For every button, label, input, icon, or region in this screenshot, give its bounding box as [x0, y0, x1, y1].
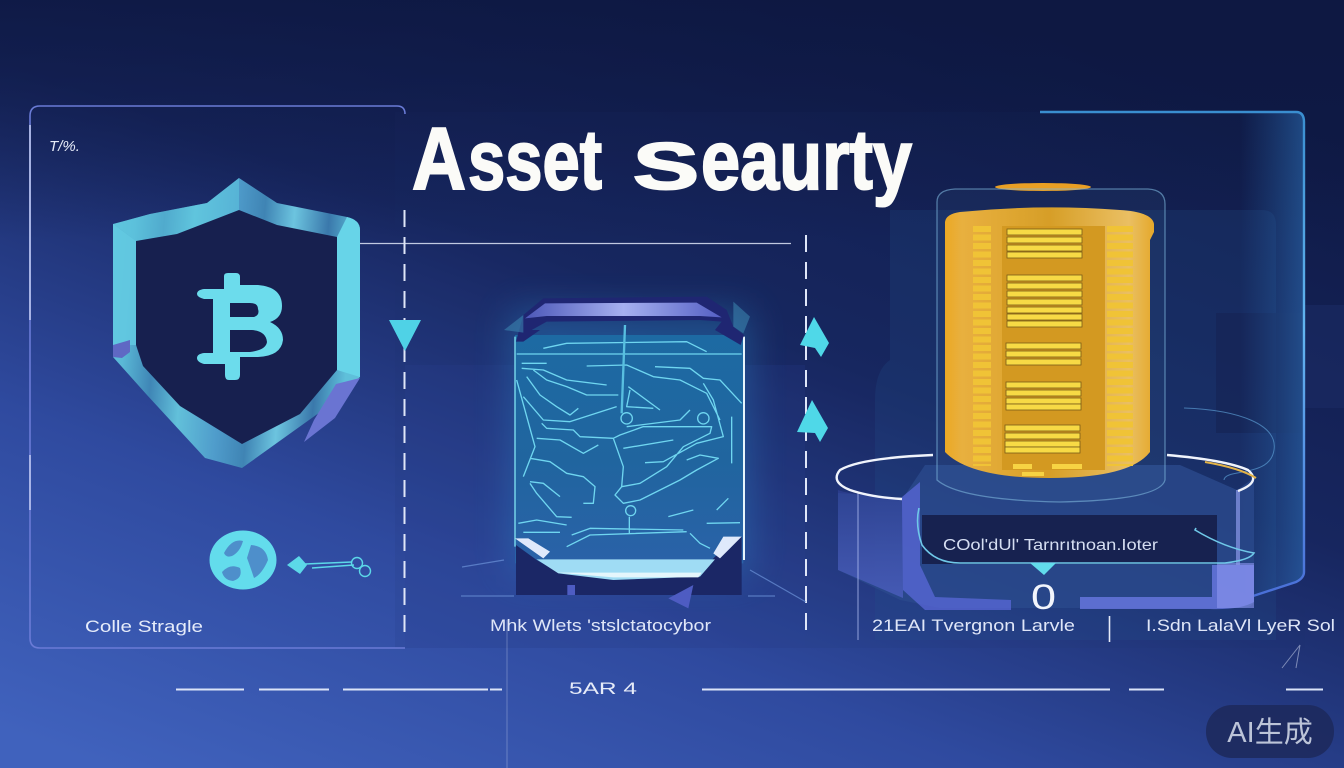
icon: key: [287, 556, 370, 576]
panel: layered vault: [837, 183, 1335, 642]
title: A: [412, 109, 466, 208]
timeline label: 5AR 4: [569, 679, 637, 698]
gold cylinder: [945, 183, 1154, 478]
callout text: COol'dUl' Tarnrıtnoan.Ioter: [943, 537, 1158, 554]
title: eaurty: [701, 113, 912, 207]
caption: transaction layer: 21EAI Tvergnon Larvle: [872, 616, 1075, 635]
icon: coin: [210, 530, 276, 590]
base ring: [837, 455, 1253, 499]
icon: shield with bitcoin symbol: [113, 178, 360, 468]
ground lines: [461, 560, 806, 602]
panel: right side backdrop: [395, 112, 1344, 648]
panel caption: Colle Stragle: [85, 617, 203, 636]
title: S: [633, 129, 699, 203]
side stacks: [973, 226, 991, 466]
connector lines and dashed dividers: [360, 210, 806, 768]
chip top frame: [516, 297, 744, 345]
panel: multi-signature chip: [461, 297, 806, 635]
centre gold bars: [1005, 229, 1082, 453]
callout pointer: [1030, 563, 1056, 575]
badge: AI generated: [1206, 705, 1334, 758]
callout outline: [918, 508, 1254, 563]
badge: AI generated: AI生成: [1227, 716, 1313, 749]
vault base: [838, 465, 1254, 640]
arrow: down: [389, 320, 421, 351]
chip caption: Mhk Wlets 'stslctatocybor: [490, 616, 711, 635]
small label: T/%.: [49, 138, 80, 155]
arrow: up lower: [797, 400, 828, 442]
chip traces: [517, 342, 742, 548]
title: sset: [468, 113, 602, 207]
arrow: up upper: [800, 317, 829, 357]
timeline rule: [176, 645, 1323, 690]
glass cylinder: [937, 189, 1165, 502]
caption: solution layer: I.Sdn LalaVl LyeR Sol: [1146, 616, 1335, 635]
panel: cold storage: [30, 106, 405, 648]
chip bottom base: [516, 537, 742, 595]
number: 0: [1031, 578, 1056, 617]
divider: [1108, 616, 1110, 642]
